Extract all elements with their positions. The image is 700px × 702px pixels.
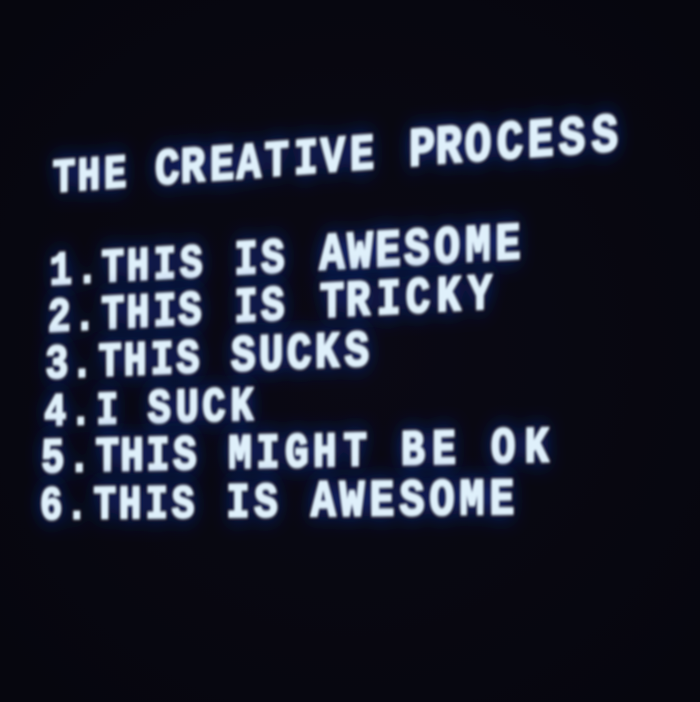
title: PROCESS [409, 104, 618, 182]
list item 6: AWESOME [311, 472, 514, 533]
list item 1: AWESOME [319, 215, 521, 286]
list item 3: SUCKS [231, 323, 369, 386]
title: CREATIVE [155, 124, 404, 200]
list item 6: 6.THIS [40, 478, 219, 533]
list item 1: 1.THIS [50, 236, 227, 299]
list item 5: 5.THIS [41, 429, 220, 488]
list item 1: IS [234, 230, 316, 290]
list item 4: 4.I [44, 384, 147, 440]
list item 5: BE [401, 421, 484, 480]
list item 5: MIGHT [228, 425, 396, 484]
list item 6: IS [226, 476, 308, 532]
list item 2: IS [234, 278, 316, 337]
list item 4: SUCK [148, 381, 254, 438]
list item 3: 3.THIS [45, 332, 228, 394]
list item 2: 2.THIS [48, 284, 228, 347]
list item 5: OK [491, 420, 549, 478]
list item 2: TRICKY [320, 266, 492, 333]
title: THE [53, 146, 152, 206]
